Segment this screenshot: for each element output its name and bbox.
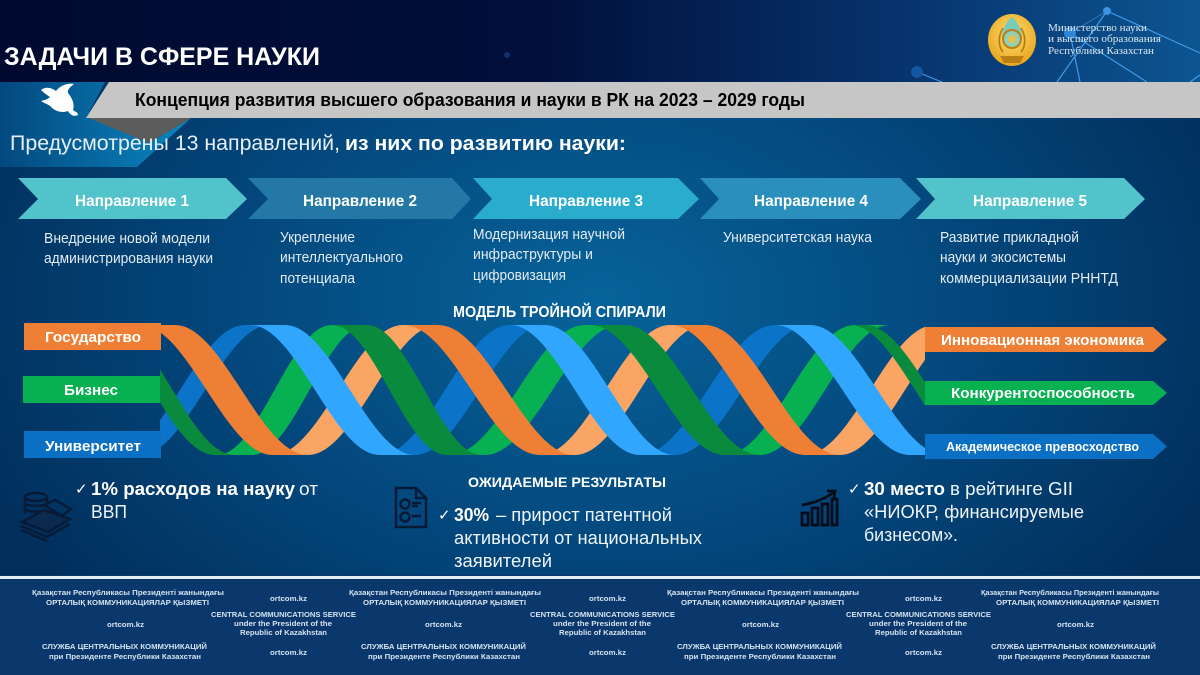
footer text: ortcom.kz: [589, 594, 626, 603]
icon: dragon logo: [41, 84, 78, 116]
footer text: Қазақстан Республикасы Президенті жанындағы: [667, 588, 859, 597]
lead sentence: из них по развитию науки:: [345, 132, 626, 155]
footer text: при Президенте Республики Казахстан: [368, 652, 520, 661]
footer text: [32, 588, 1159, 661]
footer text: ОРТАЛЫҚ КОММУНИКАЦИЯЛАР ҚЫЗМЕТІ: [681, 598, 844, 607]
result 3: в рейтинге GII: [950, 479, 1073, 499]
triple helix ribbons: [160, 325, 925, 455]
result 2: заявителей: [454, 551, 552, 571]
result 3: 30 место: [864, 479, 945, 499]
ministry name: Министерство науки: [1048, 23, 1148, 34]
direction 4: Университетская наука: [723, 230, 873, 246]
footer text: СЛУЖБА ЦЕНТРАЛЬНЫХ КОММУНИКАЦИЙ: [677, 642, 842, 651]
footer text: under the President of the: [553, 619, 651, 628]
body background: [0, 82, 1200, 577]
corner blue shape: [0, 82, 191, 167]
footer text: Republic of Kazakhstan: [875, 628, 962, 637]
result 3: бизнесом».: [864, 525, 958, 545]
direction 2: [248, 178, 471, 287]
result 3: [848, 479, 1084, 545]
footer text: СЛУЖБА ЦЕНТРАЛЬНЫХ КОММУНИКАЦИЙ: [991, 642, 1156, 651]
direction 3: Модернизация научной: [473, 227, 625, 243]
result 2: – прирост патентной: [496, 505, 672, 525]
subtitle bar: Концепция развития высшего образования и науки в РК на 2023 – 2029 годы: [135, 90, 805, 110]
result 1: ✓: [75, 481, 88, 498]
header background: [0, 0, 1200, 82]
footer text: ortcom.kz: [270, 594, 307, 603]
footer band: [0, 575, 1200, 675]
direction 5: Направление 5: [973, 193, 1087, 210]
direction 1: администрирования науки: [44, 251, 213, 267]
footer text: ortcom.kz: [905, 594, 942, 603]
icon: money stack: [21, 493, 71, 541]
direction 1: [18, 178, 247, 267]
footer text: under the President of the: [869, 619, 967, 628]
footer text: Қазақстан Республикасы Президенті жанындағы: [349, 588, 541, 597]
footer text: CENTRAL COMMUNICATIONS SERVICE: [530, 610, 675, 619]
label: business: [23, 376, 160, 403]
label: university: Университет: [45, 438, 141, 455]
footer text: Қазақстан Республикасы Президенті жанындағы: [981, 588, 1159, 597]
icon: checklist document: [396, 488, 426, 527]
direction 5: [916, 178, 1145, 287]
footer text: при Президенте Республики Казахстан: [49, 652, 201, 661]
lead sentence: [10, 131, 626, 155]
direction 1: Внедрение новой модели: [44, 231, 210, 247]
footer text: ortcom.kz: [1057, 620, 1094, 629]
direction 5: коммерциализации РННТД: [940, 271, 1118, 287]
footer text: Republic of Kazakhstan: [559, 628, 646, 637]
results heading: ОЖИДАЕМЫЕ РЕЗУЛЬТАТЫ: [468, 474, 666, 490]
direction 4: [700, 178, 921, 246]
label: business: Бизнес: [64, 382, 118, 399]
direction 5: Развитие прикладной: [940, 230, 1079, 246]
footer text: СЛУЖБА ЦЕНТРАЛЬНЫХ КОММУНИКАЦИЙ: [361, 642, 526, 651]
footer text: при Президенте Республики Казахстан: [684, 652, 836, 661]
coat of arms emblem: [988, 14, 1036, 66]
lead sentence: Предусмотрены 13 направлений,: [10, 131, 340, 155]
helix heading: МОДЕЛЬ ТРОЙНОЙ СПИРАЛИ: [453, 303, 666, 321]
ministry name: Республики Казахстан: [1048, 46, 1155, 57]
arrow: competitiveness: Конкурентоспособность: [951, 386, 1135, 402]
direction 3: инфраструктуры и: [473, 247, 593, 263]
footer text: ortcom.kz: [270, 648, 307, 657]
footer text: Republic of Kazakhstan: [240, 628, 327, 637]
result 1: от: [299, 479, 318, 499]
footer text: CENTRAL COMMUNICATIONS SERVICE: [211, 610, 356, 619]
network decoration: [504, 7, 1200, 82]
footer text: ОРТАЛЫҚ КОММУНИКАЦИЯЛАР ҚЫЗМЕТІ: [996, 598, 1159, 607]
footer text: СЛУЖБА ЦЕНТРАЛЬНЫХ КОММУНИКАЦИЙ: [42, 642, 207, 651]
direction 2: интеллектуального: [280, 250, 403, 266]
result 2: [438, 505, 702, 571]
subtitle bar: [86, 82, 1200, 118]
result 2: 30%: [454, 505, 489, 525]
direction 2: Направление 2: [303, 193, 417, 210]
label: state: [24, 323, 161, 350]
result 3: «НИОКР, финансируемые: [864, 502, 1084, 522]
footer text: ortcom.kz: [589, 648, 626, 657]
footer text: при Президенте Республики Казахстан: [998, 652, 1150, 661]
result 1: 1% расходов на науку: [91, 479, 295, 499]
direction 2: потенциала: [280, 271, 356, 287]
result 1: [75, 479, 318, 522]
direction 3: цифровизация: [473, 268, 566, 284]
grey bar fold: [86, 117, 193, 143]
label: state: Государство: [45, 329, 141, 346]
footer text: ortcom.kz: [905, 648, 942, 657]
direction 2: Укрепление: [280, 230, 355, 246]
arrow: academic excellence: [925, 434, 1167, 459]
direction 5: науки и экосистемы: [940, 250, 1066, 266]
result 2: ✓: [438, 507, 451, 524]
label: university: [24, 431, 161, 458]
ministry name: и высшего образования: [1048, 34, 1161, 45]
footer text: Қазақстан Республикасы Президенті жанындағы: [32, 588, 224, 597]
footer text: ortcom.kz: [425, 620, 462, 629]
direction 4: Направление 4: [754, 193, 868, 210]
title: ЗАДАЧИ В СФЕРЕ НАУКИ: [4, 43, 320, 71]
ministry name: [1048, 23, 1161, 57]
arrow: academic excellence: Академическое превосходство: [946, 440, 1139, 454]
footer text: ОРТАЛЫҚ КОММУНИКАЦИЯЛАР ҚЫЗМЕТІ: [363, 598, 526, 607]
arrow: innovation economy: [925, 327, 1167, 352]
footer text: CENTRAL COMMUNICATIONS SERVICE: [846, 610, 991, 619]
icon: growth chart: [802, 491, 837, 525]
footer text: under the President of the: [234, 619, 332, 628]
footer text: ortcom.kz: [742, 620, 779, 629]
direction 3: [473, 178, 699, 284]
result 1: ВВП: [91, 502, 127, 522]
result 2: активности от национальных: [454, 528, 702, 548]
arrow: innovation economy: Инновационная экономика: [941, 333, 1145, 349]
direction 3: Направление 3: [529, 193, 643, 210]
footer text: ortcom.kz: [107, 620, 144, 629]
direction 1: Направление 1: [75, 193, 189, 210]
arrow: competitiveness: [925, 381, 1167, 405]
footer text: ОРТАЛЫҚ КОММУНИКАЦИЯЛАР ҚЫЗМЕТІ: [46, 598, 209, 607]
result 3: ✓: [848, 481, 861, 498]
